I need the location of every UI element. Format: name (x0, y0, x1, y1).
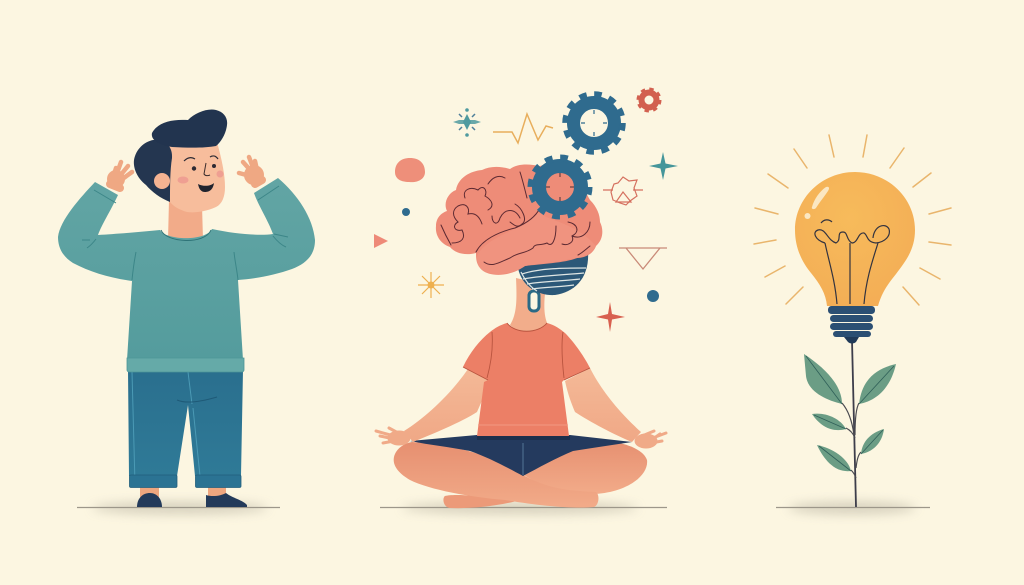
symbol: red outlined cog (603, 177, 643, 205)
sparkle: red star (596, 302, 625, 332)
gear: large blue (566, 94, 622, 152)
ball: coral (395, 158, 425, 182)
figure: meditating person with brain (376, 158, 667, 515)
pants (128, 370, 243, 488)
cerebellum (518, 250, 588, 295)
brain folds (441, 172, 590, 265)
t-shirt (463, 323, 590, 436)
sweater (58, 178, 315, 360)
leaf veins (806, 356, 894, 471)
cheeks (178, 176, 188, 184)
dot: left blue (402, 208, 410, 216)
ground shadow: man (77, 501, 280, 515)
trouser cuffs (130, 475, 241, 488)
back foot (443, 495, 520, 508)
ear (154, 173, 170, 189)
bulb glass (795, 172, 915, 306)
eyes and brows (184, 156, 218, 171)
sparkle: teal star (649, 152, 678, 180)
face (168, 142, 225, 212)
leaves (804, 354, 896, 471)
dot: right blue (647, 290, 659, 302)
arms (404, 369, 490, 442)
sweater hem (127, 358, 244, 372)
left leg (394, 442, 598, 508)
hand: right (239, 157, 263, 184)
brain (436, 164, 602, 275)
plant stem (852, 340, 856, 507)
ground shadow: meditator (380, 501, 667, 515)
side hair (134, 140, 172, 202)
hand: right mudra (635, 431, 666, 448)
bulb base (828, 306, 875, 344)
leaf branches (842, 403, 861, 478)
triangle: coral (374, 234, 388, 248)
filament (815, 220, 889, 304)
figure: standing man (58, 110, 315, 515)
light rays (754, 135, 951, 305)
gear: small red (638, 89, 660, 111)
gear on brain (531, 158, 589, 216)
pony tail clip (529, 291, 539, 311)
neck (168, 200, 203, 240)
nose (204, 163, 210, 176)
sweater details (82, 186, 288, 280)
shoes (137, 493, 247, 507)
ankles (140, 484, 226, 498)
brain lobe highlight (477, 212, 596, 274)
triangle: outlined (619, 248, 667, 269)
top hair (152, 110, 227, 148)
hand: left (108, 162, 132, 188)
pulse line (493, 114, 553, 143)
sparkle: orange star (418, 272, 444, 298)
sparkle: teal snowflake (453, 108, 481, 137)
right leg (520, 440, 647, 494)
head (134, 110, 227, 212)
ground shadow: plant (776, 501, 930, 515)
figure: light bulb plant (754, 135, 951, 515)
hand: left mudra (376, 428, 410, 445)
bulb highlight (804, 187, 829, 219)
neck (510, 278, 548, 332)
mouth (198, 183, 214, 192)
shorts (410, 435, 632, 476)
